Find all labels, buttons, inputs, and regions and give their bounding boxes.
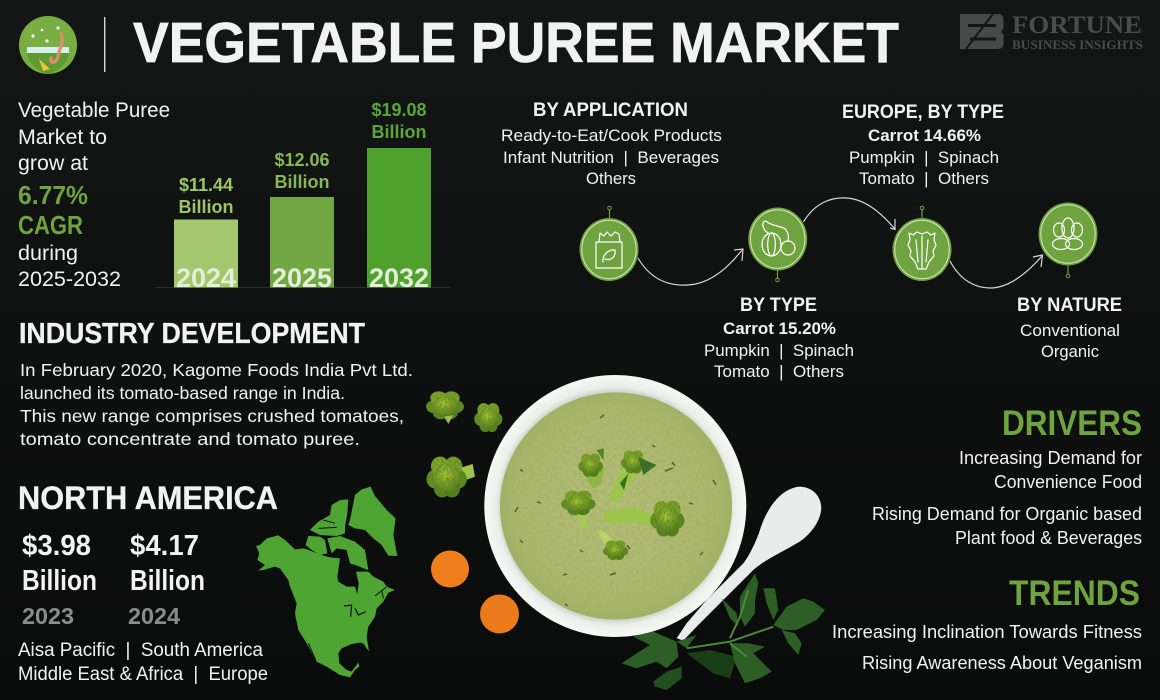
text block: industry development: launched its tomato-based range in India. [20,383,345,403]
text block: Europe by type [842,102,1004,188]
text block: other regions: Aisa Pacific | South America [18,640,263,661]
bar 2024 [174,175,238,293]
text block: by type: BY TYPE [740,295,817,316]
icon: grocery bag [580,206,638,281]
stat: 2024 value: $4.17 [130,530,199,562]
text block: by type: Pumpkin | Spinach [704,341,854,360]
bar 2024: $11.44 [179,175,233,195]
stat: 2023 value: $3.98 [22,530,91,562]
text block: by application: Infant Nutrition | Beverages [503,148,719,167]
text block: trends [832,622,1142,673]
bar chart: market size [155,100,450,293]
bar 2024: Billion [178,197,234,217]
text block: CAGR summary: 6.77% [18,180,88,210]
stat: 2024 value: 2024 [128,603,180,629]
logo: Fortune Business Insights [960,12,1143,52]
icon: pumpkin and tomato [748,208,807,282]
text block: by type: Carrot 15.20% [723,319,836,338]
text block: industry development: This new range comprises crushed tomatoes, [20,406,404,426]
soup [500,392,732,620]
broccoli in soup [561,448,684,560]
stat: 2023 value: 2023 [22,603,74,629]
spoon [677,487,821,641]
bar 2032 [367,100,431,293]
text block: CAGR summary: CAGR [18,210,83,240]
header divider [104,17,105,72]
broccoli florets [426,391,502,497]
bar 2025 [270,150,334,293]
stat: 2024 value [128,530,205,629]
text block: other regions [18,640,268,685]
icon: spinach and potato [1038,202,1098,278]
text block: by nature [1017,295,1122,361]
bar 2025: 2025 [272,263,332,293]
text block: Europe by type: Tomato | Others [859,169,989,188]
text block: by application: BY APPLICATION [533,100,688,121]
bar 2025: Billion [274,172,330,192]
icon: lettuce [892,206,952,281]
text block: by type: Tomato | Others [714,362,844,381]
text block: CAGR summary: 2025-2032 [18,268,121,291]
bar 2032: 2032 [369,263,429,293]
soup flecks [515,415,716,606]
text block: drivers: Increasing Demand for [959,448,1142,468]
arrow: type to Europe [804,198,895,230]
text block: trends: Rising Awareness About Veganism [862,653,1142,673]
text block: by nature: Conventional [1020,321,1120,340]
text block: Europe by type: Pumpkin | Spinach [849,148,999,167]
bar 2025: $12.06 [274,150,330,170]
illustration: bowl of vegetable puree [484,375,821,641]
bar 2032: $19.08 [371,100,427,120]
bowl [484,375,746,637]
text block: by type [704,295,854,381]
text block: other regions: Middle East & Africa | Europe [18,664,268,685]
heading: industry development: INDUSTRY DEVELOPMENT [19,318,365,350]
text block: by application: Others [586,169,636,188]
heading: trends: TRENDS [1009,574,1140,613]
text block: CAGR summary: Vegetable Puree [18,99,170,122]
stat: 2023 value [22,530,97,629]
text block: Europe by type: EUROPE, BY TYPE [842,102,1004,123]
text block: CAGR summary: grow at [18,152,88,175]
text block: CAGR summary [18,99,170,291]
carrot slices [431,550,519,634]
soup texture [500,392,732,620]
stat: 2023 value: Billion [22,565,97,597]
text block: drivers: Convenience Food [994,472,1142,492]
arrow: application to type [638,249,743,285]
text block: drivers [872,448,1142,548]
text block: drivers: Rising Demand for Organic based [872,504,1142,524]
text block: industry development: In February 2020, Kagome Foods India Pvt Ltd. [20,360,413,380]
text block: by application [501,100,722,188]
text block: CAGR summary: during [18,242,78,265]
text block: industry development: tomato concentrate and tomato puree. [20,429,360,449]
icon: soup logo [19,16,77,74]
bar 2032: Billion [372,122,426,142]
text block: by nature: BY NATURE [1017,295,1122,316]
text block: industry development [20,360,413,449]
logo: Fortune Business Insights: BUSINESS INSIGHTS [1012,38,1143,52]
text block: Europe by type: Carrot 14.66% [868,126,981,145]
text block: by application: Ready-to-Eat/Cook Products [501,126,722,145]
bar 2024: 2024 [176,263,236,293]
title: VEGETABLE PUREE MARKET [133,11,899,75]
heading: drivers: DRIVERS [1002,404,1142,443]
heading: North America: NORTH AMERICA [18,480,278,516]
parsley sprig [622,573,825,690]
text block: by nature: Organic [1041,342,1099,361]
arrow: Europe to nature [950,255,1042,288]
text block: trends: Increasing Inclination Towards Fitness [832,622,1142,642]
text block: CAGR summary: Market to [18,126,107,149]
stat: 2024 value: Billion [130,565,205,597]
text block: drivers: Plant food & Beverages [955,528,1142,548]
map: North America [256,487,397,677]
logo: Fortune Business Insights: FORTUNE [1012,12,1142,39]
